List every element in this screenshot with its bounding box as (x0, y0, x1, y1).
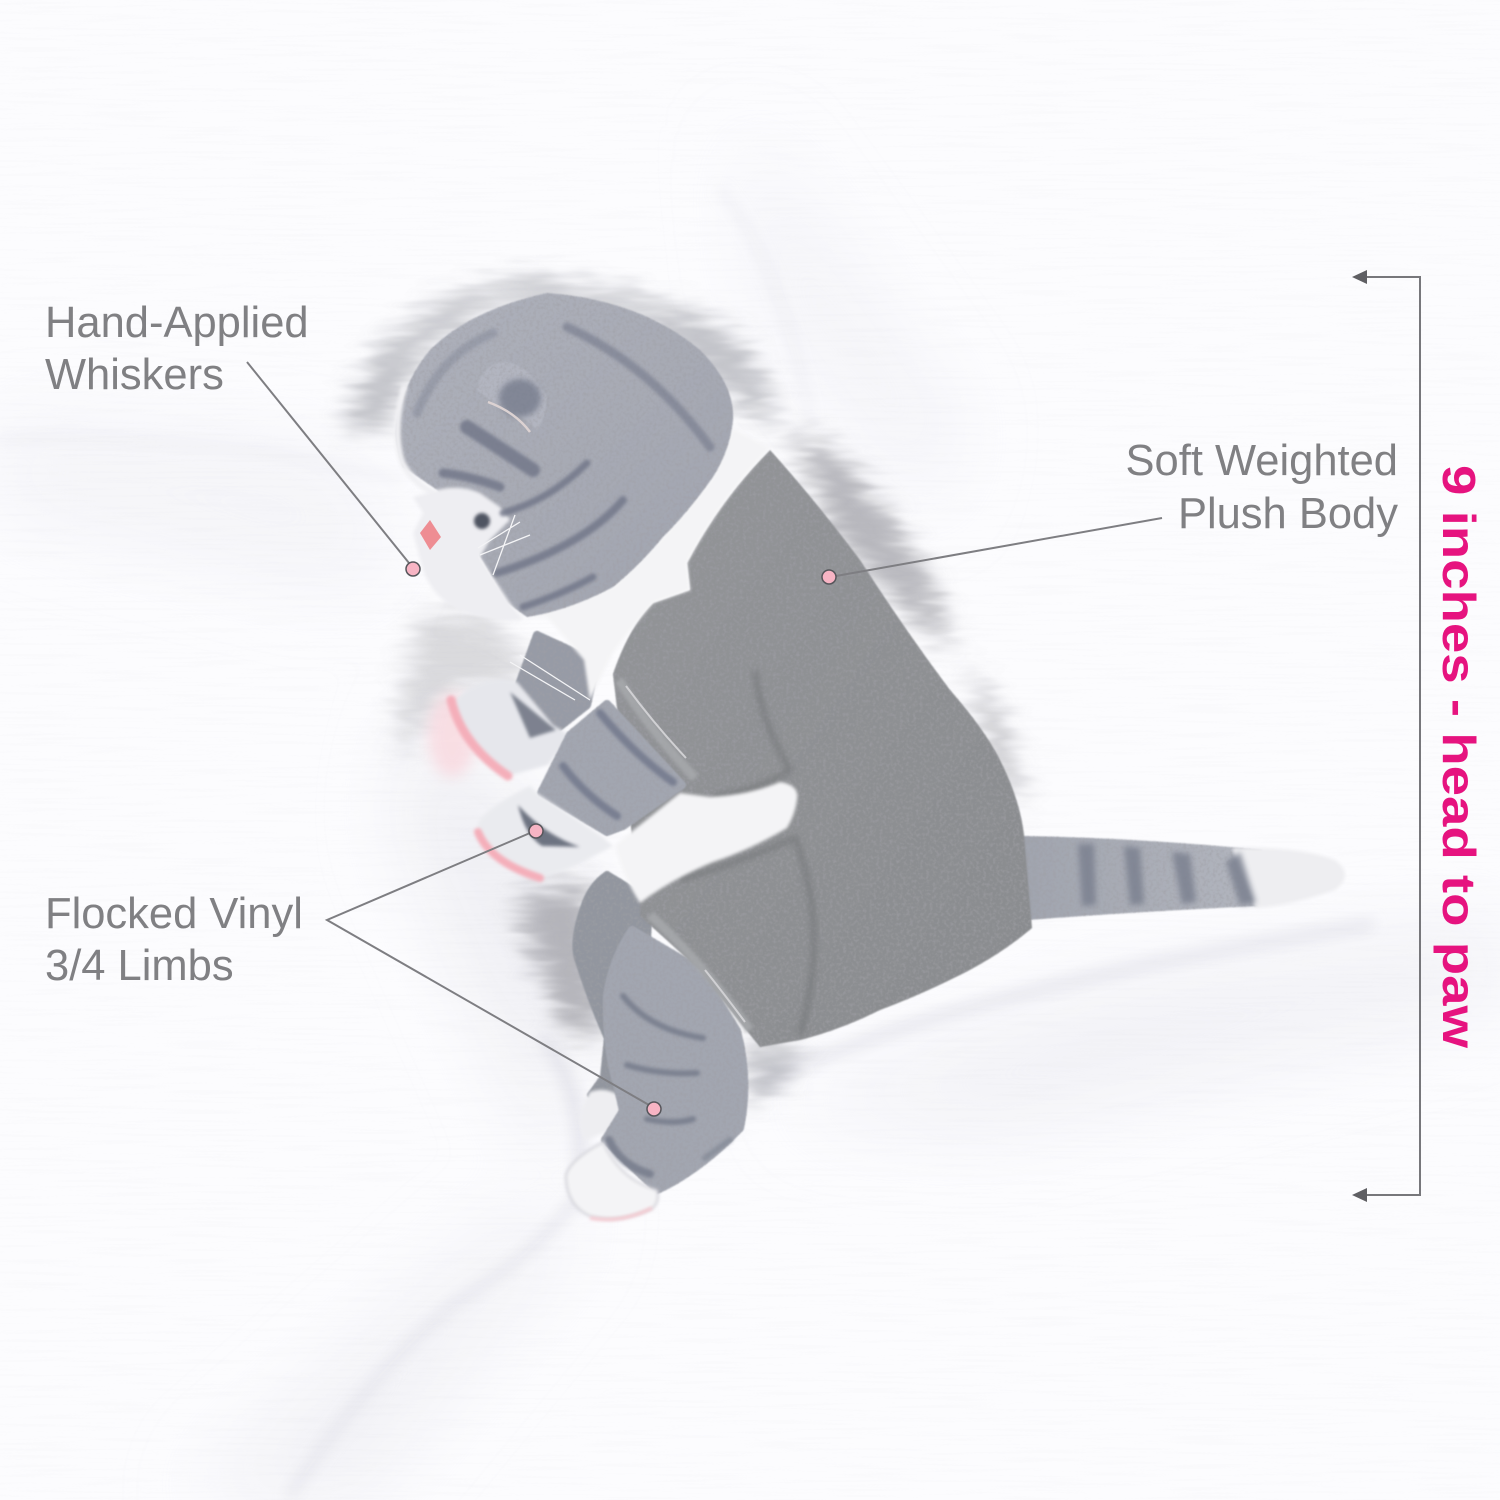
cat head (396, 293, 733, 700)
callout: flocked vinyl limbs (45, 824, 661, 1116)
cat far foreleg (517, 635, 596, 732)
label: soft weighted plush body: Soft Weighted (1126, 437, 1398, 485)
pink glow beside paw (428, 693, 476, 777)
label: flocked vinyl 3/4 limbs: Flocked Vinyl (45, 890, 303, 938)
foot pink toe edge (590, 1208, 652, 1220)
sleeve and flap rims (619, 680, 750, 1030)
marker dot: arm (529, 824, 543, 838)
cat far hind leg (575, 874, 650, 1100)
cat near hind foot (566, 1142, 658, 1219)
head white muzzle (413, 488, 523, 621)
callout: hand-applied whiskers (45, 299, 420, 576)
leader lines (327, 833, 649, 1105)
body fold shading (680, 670, 814, 1035)
leader line (247, 362, 409, 563)
dimension label: 9 inches - head to paw (1433, 465, 1485, 1049)
cat shadow on fabric (345, 281, 1025, 1110)
marker dot (822, 570, 836, 584)
cat ear (477, 362, 547, 432)
dimension bracket with arrows (1352, 270, 1420, 1202)
cat near hind leg (605, 930, 744, 1190)
label: soft weighted plush body: Plush Body (1178, 490, 1398, 538)
plush cat (396, 293, 1345, 1220)
label: hand-applied whiskers: Whiskers (45, 351, 224, 399)
cat far paw (451, 680, 570, 776)
cat far hind foot (580, 1090, 625, 1140)
cat nose (420, 520, 441, 550)
label: hand-applied whiskers: Hand-Applied (45, 299, 309, 347)
marker dot: leg (647, 1102, 661, 1116)
label: flocked vinyl 3/4 limbs: 3/4 Limbs (45, 942, 234, 990)
cat eye (474, 513, 490, 529)
head stripes (417, 327, 710, 607)
leader line (836, 518, 1162, 576)
seam stitching (626, 686, 745, 1022)
marker dot (406, 562, 420, 576)
callout: soft weighted plush body (822, 437, 1398, 584)
cat tail (1022, 836, 1345, 920)
cat white belly (615, 782, 797, 903)
cat whiskers (478, 515, 590, 700)
head white edge (397, 388, 432, 492)
cat near paw (477, 786, 613, 878)
cat near foreleg (541, 704, 682, 832)
cat white ruff (527, 428, 770, 700)
cat plush body (613, 450, 1032, 1047)
